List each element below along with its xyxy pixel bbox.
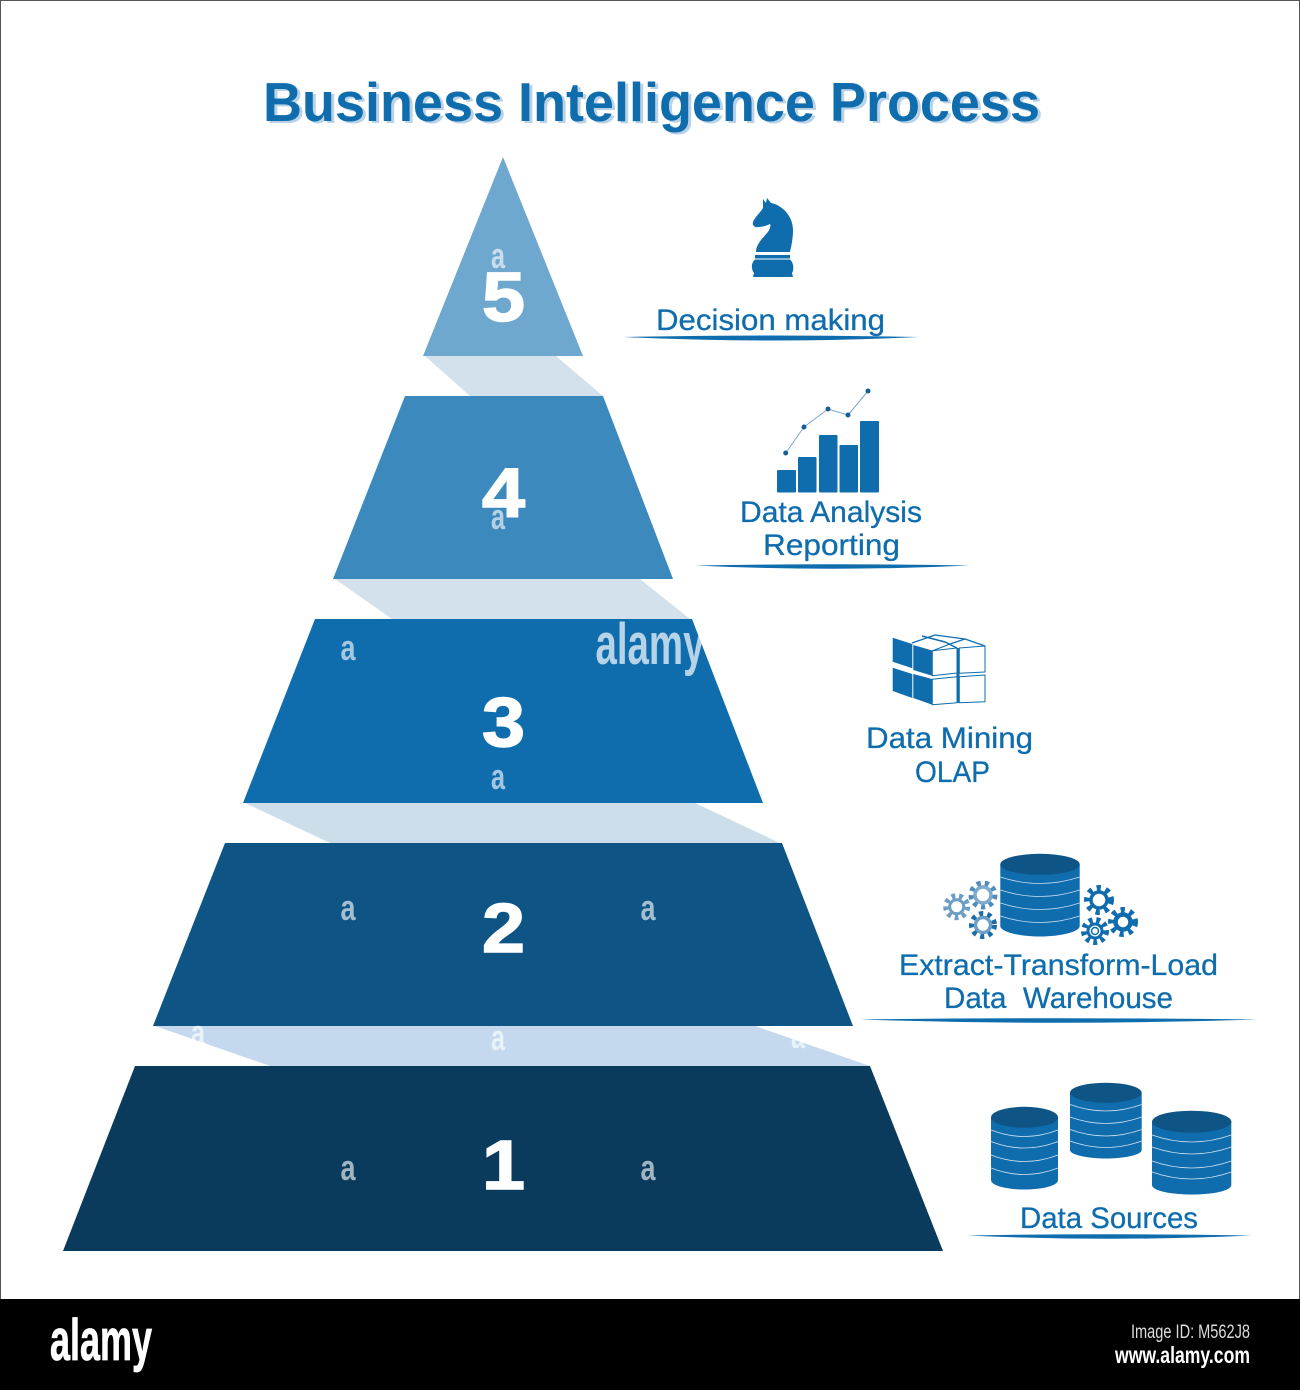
stock watermark: a — [491, 496, 506, 537]
footer logo: alamy — [50, 1308, 152, 1373]
footer bar: Image ID: M562J8 — [1131, 1322, 1250, 1343]
stock watermark: a — [340, 1147, 356, 1188]
label: data analysis reporting: Data Analysis — [740, 496, 922, 529]
pyramid tier 5 — [423, 157, 583, 356]
icon: data source cylinder right — [1152, 1111, 1231, 1194]
pyramid tier 4: 4 — [482, 454, 525, 532]
title: Business Intelligence Process — [263, 71, 1040, 133]
pyramid tier 1 — [63, 1066, 943, 1251]
icon: gears right — [1084, 888, 1134, 942]
icon: data source cylinder left — [991, 1107, 1058, 1190]
connector bands between pyramid tiers — [155, 356, 870, 1066]
pyramid tier 2: 2 — [482, 889, 525, 967]
label: data sources: Data Sources — [1020, 1202, 1198, 1235]
icon: data source cylinder middle — [1070, 1083, 1142, 1158]
label: data mining olap: OLAP — [915, 756, 990, 789]
stock watermark — [191, 235, 806, 1188]
stock watermark: a — [191, 1012, 206, 1053]
pyramid tier 1: 1 — [482, 1126, 525, 1204]
label: data mining olap: Data Mining — [866, 722, 1033, 755]
label: decision making: Decision making — [656, 304, 885, 337]
label: extract transform load data warehouse: Data Warehouse — [944, 982, 1173, 1015]
label: extract transform load data warehouse: Extract-Transform-Load — [899, 949, 1218, 982]
icon: data warehouse cylinder — [1000, 854, 1080, 936]
footer bar — [0, 1299, 1300, 1390]
title: Business Intelligence Process — [266, 73, 1043, 135]
label: data mining olap — [866, 722, 1033, 789]
stock watermark: a — [491, 756, 506, 797]
label: data analysis reporting: Reporting — [763, 529, 900, 562]
stock watermark: a — [340, 627, 356, 668]
pyramid tier 3: 3 — [482, 683, 525, 761]
icon: gears left — [947, 884, 994, 936]
stock watermark: a — [491, 1017, 506, 1058]
stock watermark: a — [640, 1147, 656, 1188]
pyramid tier 3 — [243, 619, 763, 803]
pyramid tier 5: 5 — [482, 258, 525, 336]
stock watermark: a — [791, 1015, 806, 1056]
footer bar: www.alamy.com — [1114, 1342, 1250, 1368]
stock watermark: a — [640, 887, 656, 928]
label: decision making — [623, 304, 919, 340]
pyramid tier 2 — [153, 843, 853, 1026]
stock watermark: a — [340, 887, 356, 928]
label: extract transform load data warehouse — [860, 949, 1258, 1023]
icon: bar chart with trend line — [777, 388, 879, 492]
label: data sources — [967, 1202, 1252, 1239]
icon: chess knight — [752, 198, 793, 277]
icon: olap cube — [893, 635, 985, 705]
stock watermark: alamy — [596, 612, 704, 677]
pyramid tier 4 — [333, 396, 673, 579]
stock watermark: a — [491, 235, 506, 276]
label: data analysis reporting — [695, 496, 970, 569]
